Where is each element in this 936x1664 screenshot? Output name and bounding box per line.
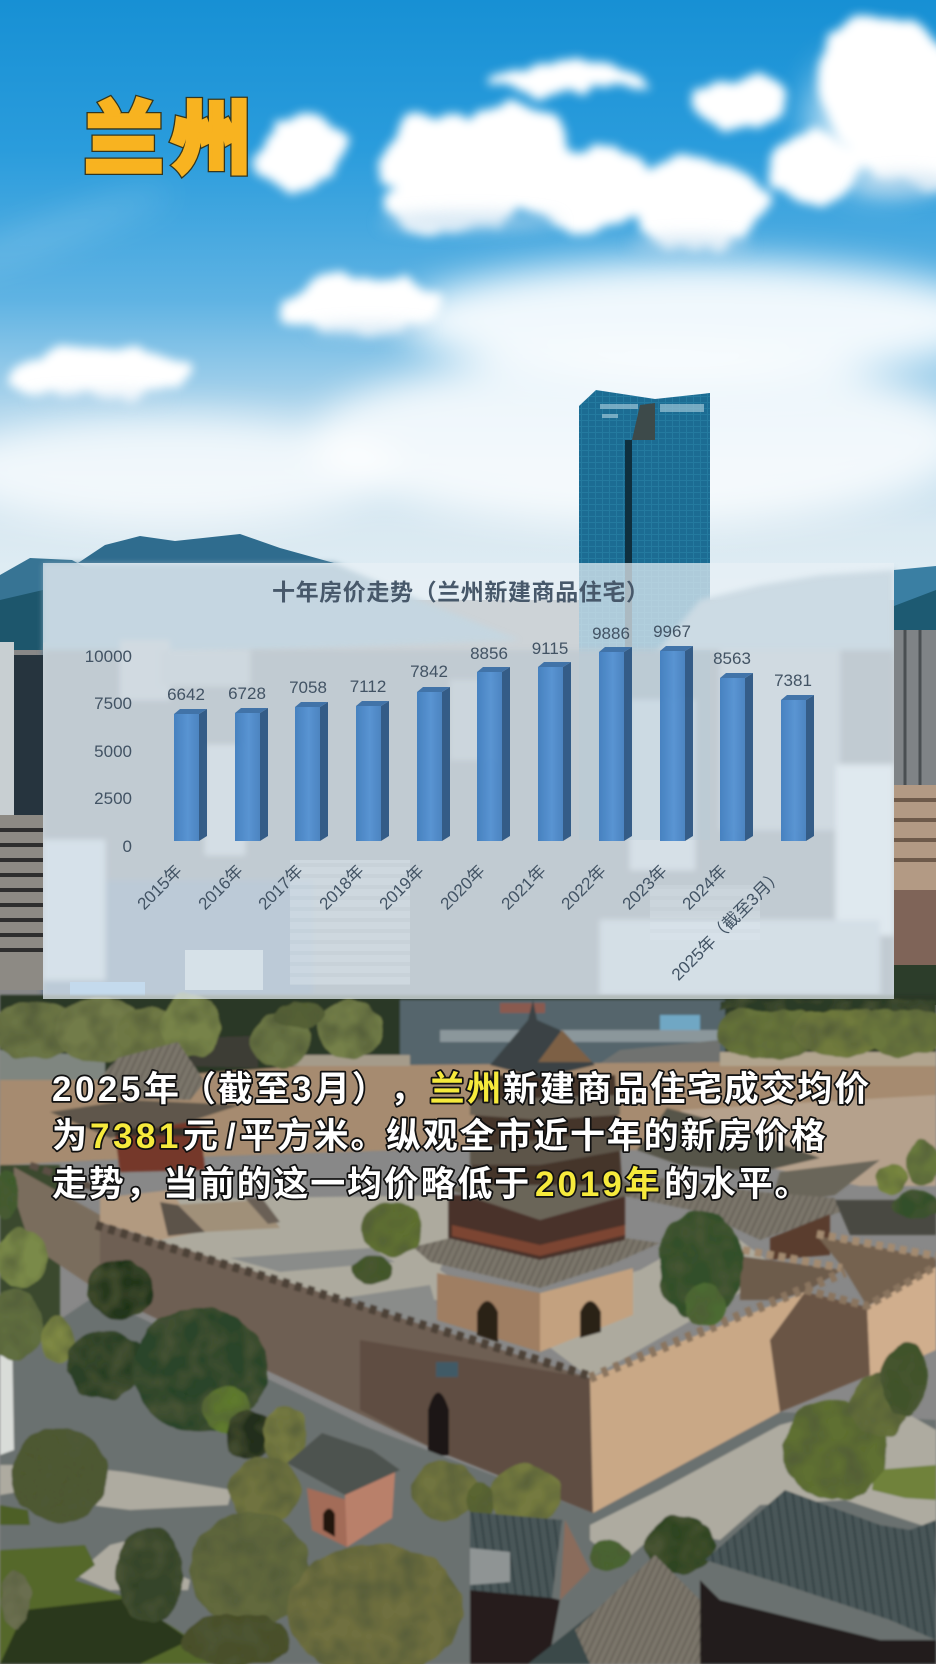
right hall roof: [700, 1490, 936, 1664]
bridge and road: [400, 1000, 725, 1070]
caption text: 2025: [52, 1070, 144, 1109]
caption text: 3: [292, 1070, 315, 1109]
x axis labels: [134, 861, 787, 984]
tower: [579, 390, 710, 860]
left fortress wall: [30, 1165, 593, 1513]
left corner tower: [14, 1167, 100, 1292]
caption text: /: [226, 1117, 238, 1156]
x axis labels: 2015年: [134, 861, 186, 914]
chart title: 十年房价走势（兰州新建商品住宅）: [272, 573, 650, 607]
value labels: 8563: [713, 649, 751, 668]
y axis labels: [85, 647, 132, 856]
value labels: 7112: [350, 677, 386, 696]
caption text: 7381: [90, 1117, 182, 1156]
riverside trees: [0, 993, 936, 1068]
value labels: 7381: [774, 671, 812, 690]
ramp and stairs: [100, 1190, 280, 1240]
x axis labels: 2023年: [619, 861, 671, 914]
title: 兰: [84, 95, 164, 184]
y axis labels: 0: [123, 837, 132, 856]
y axis labels: 7500: [94, 694, 132, 713]
gatehouse: [287, 1433, 400, 1547]
value labels: 7058: [289, 678, 327, 697]
foreground hall roof: [528, 1555, 730, 1664]
caption text: 平方米。: [240, 1117, 387, 1156]
right fortress wall: [590, 1266, 936, 1513]
river: [0, 1062, 936, 1186]
title: 州: [171, 95, 251, 184]
y axis labels: 10000: [85, 647, 132, 666]
x axis labels: 2024年: [679, 861, 731, 914]
title: 兰: [84, 95, 164, 184]
caption text: 元: [183, 1117, 220, 1156]
x axis labels: 2020年: [437, 861, 489, 914]
hall on far bank: [190, 1036, 258, 1068]
value labels: 6642: [167, 685, 205, 704]
value labels: 7842: [410, 662, 448, 681]
x axis labels: 2016年: [195, 861, 247, 914]
caption text: 2019年: [535, 1165, 663, 1204]
embankment: [0, 1050, 936, 1080]
value labels: 9115: [532, 639, 568, 658]
x axis labels: 2025年（截至3月）: [668, 865, 787, 984]
lower scene: [0, 993, 936, 1664]
caption text: 月）: [315, 1070, 389, 1109]
chart: [85, 573, 814, 984]
distant mountains: [0, 534, 936, 660]
x axis labels: 2022年: [558, 861, 610, 914]
caption text: （截至: [181, 1070, 291, 1109]
caption text: ，: [390, 1070, 427, 1109]
value labels: 9886: [592, 624, 630, 643]
caption text: [52, 1070, 871, 1204]
main tower pavilion: [413, 1000, 660, 1352]
ground: [0, 1296, 936, 1664]
white building left: [0, 1326, 14, 1455]
sky background: [0, 0, 936, 600]
x axis labels: 2019年: [376, 861, 428, 914]
sunlit paths: [0, 1398, 936, 1590]
value labels: 9967: [653, 622, 691, 641]
caption text: 年: [144, 1070, 181, 1109]
title: [84, 95, 251, 184]
y axis labels: 2500: [94, 789, 132, 808]
x axis labels: 2018年: [316, 861, 368, 914]
lower hall: [470, 1512, 590, 1664]
city skyline: [0, 630, 936, 1005]
panel: chart background: [43, 563, 894, 999]
caption text: 兰州: [430, 1070, 503, 1109]
clouds: [0, 8, 936, 525]
x axis labels: 2017年: [255, 861, 307, 914]
caption text: 纵观全市近十年的新房价格: [386, 1117, 828, 1156]
value labels: 8856: [470, 644, 508, 663]
title: 州: [171, 95, 251, 184]
right pavilion: [620, 1108, 936, 1260]
plaza shadows: [230, 1248, 440, 1330]
inner walls right: [740, 1234, 936, 1306]
bars: [174, 646, 814, 841]
caption text: 的水平。: [664, 1165, 811, 1204]
caption text: 当前的这一均价略低于: [163, 1165, 531, 1204]
far bank background: [0, 995, 936, 1080]
left edge greenery: [0, 1165, 60, 1365]
y axis labels: 5000: [94, 742, 132, 761]
caption text: 新建商品住宅成交均价: [503, 1070, 871, 1109]
x axis labels: 2021年: [498, 861, 550, 914]
trees: [0, 1138, 936, 1664]
value labels: 6728: [228, 684, 266, 703]
caption text: 走势，: [52, 1165, 162, 1204]
gate arch: [428, 1392, 449, 1457]
lawns: [0, 1465, 936, 1664]
caption text: 为: [52, 1117, 89, 1156]
left pavilion: [50, 1042, 240, 1172]
value labels: [167, 622, 812, 704]
plaza: [100, 1195, 780, 1378]
